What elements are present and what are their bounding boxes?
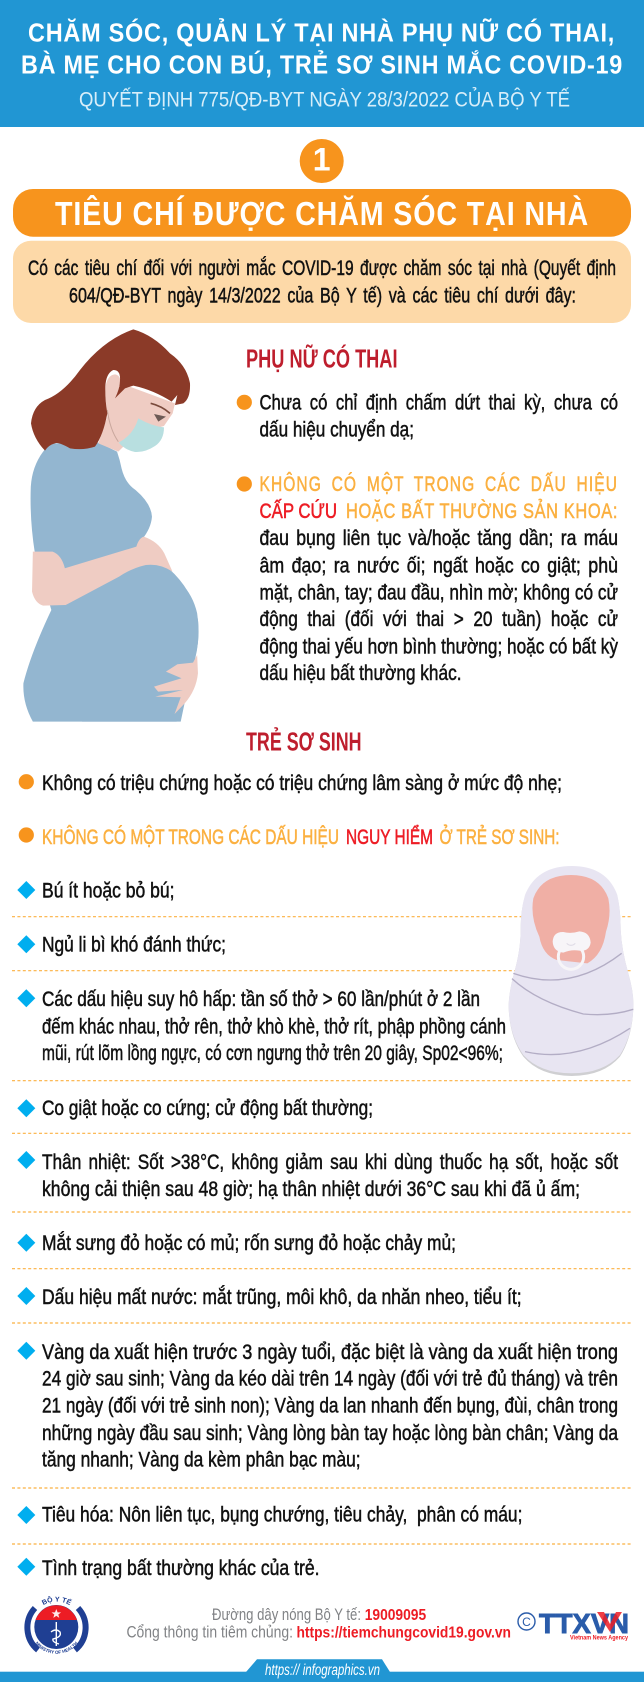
logo: Ministry of Health: BỘ Y TẾ — [42, 1596, 72, 1606]
logo: Ministry of Health: MINISTRY OF HEALTH — [36, 1642, 78, 1654]
danger sign: jaundice — [17, 1340, 618, 1472]
face, neck and ear — [98, 374, 175, 452]
illustration: pregnant woman with mask — [23, 443, 199, 722]
footer contact text: https://tiemchungcovid19.gov.vn — [296, 1624, 511, 1641]
danger sign: seizures: Co giật hoặc co cứng; cử động bất thường; — [42, 1096, 373, 1120]
lower hand — [154, 655, 198, 714]
danger sign: other abnormalities: Tình trạng bất thường khác của trẻ. — [42, 1556, 320, 1580]
danger sign: respiratory distress: Các dấu hiệu suy hô hấp: tần số thở > 60 lần/phút ở 2 lần — [42, 987, 480, 1011]
danger sign: dehydration: Dấu hiệu mất nước: mắt trũng, môi khô, da nhăn nheo, tiểu ít; — [42, 1284, 522, 1309]
hair — [31, 329, 190, 451]
dress — [23, 443, 199, 722]
swaddle — [509, 867, 633, 1076]
pacifier — [553, 931, 591, 969]
criterion: no danger signs: NGUY HIỂM — [346, 824, 433, 849]
eye and brow — [151, 403, 170, 413]
main title — [21, 18, 623, 80]
mask — [119, 418, 164, 452]
danger sign: jaundice: tăng nhanh; Vàng da kèm phân bạc màu; — [42, 1448, 361, 1472]
bottom band with website tab: https:// infographics.vn — [265, 1662, 380, 1679]
danger sign: respiratory distress — [17, 987, 506, 1065]
section number badge — [300, 139, 344, 183]
arm and upper hand — [32, 537, 172, 606]
danger sign: body temperature — [17, 1150, 618, 1201]
heading: pregnant women: PHỤ NỮ CÓ THAI — [246, 343, 398, 373]
footer contact text: Đường dây nóng Bộ Y tế: — [212, 1605, 361, 1624]
danger sign: lethargy: Ngủ li bì khó đánh thức; — [42, 933, 226, 957]
illustration: swaddled newborn with pacifier — [509, 866, 633, 1076]
panel: newborns — [19, 727, 562, 849]
heading: newborns: TRẺ SƠ SINH — [246, 727, 362, 757]
section number badge: 1 — [313, 142, 331, 178]
illustration: woman's head — [31, 329, 190, 452]
criterion: no emergency signs: dấu hiệu bất thường khác. — [260, 661, 462, 685]
criterion: no danger signs: KHÔNG CÓ MỘT TRONG CÁC DẤU HIỆU — [42, 824, 339, 849]
danger sign: respiratory distress: đếm khác nhau, thở rên, thở khò khè, thở rít, phập phồng cánh — [42, 1014, 506, 1038]
logo: TTXVN: C — [522, 1615, 531, 1629]
danger sign: digestion: Tiêu hóa: Nôn liên tục, bụng chướng, tiêu chảy, phân có máu; — [42, 1503, 522, 1527]
belly — [53, 565, 199, 722]
ear — [106, 375, 120, 397]
danger sign: poor feeding: Bú ít hoặc bỏ bú; — [42, 879, 174, 903]
criterion: no termination indication — [237, 390, 618, 442]
criterion: no termination indication: dấu hiệu chuyển dạ; — [260, 418, 414, 442]
criterion: no danger signs: Ở TRẺ SƠ SINH: — [440, 824, 560, 849]
logo: Ministry of Health — [24, 1596, 89, 1654]
criterion: no emergency signs — [237, 471, 618, 685]
logo: TTXVN: TTXVN — [539, 1608, 629, 1639]
footer contact text — [126, 1605, 511, 1641]
footer contact text: 19009095 — [365, 1607, 427, 1624]
intro box — [13, 241, 631, 323]
criterion: no emergency signs: CẤP CỨU — [260, 498, 337, 523]
footer contact text: Cổng thông tin tiêm chủng: — [126, 1622, 293, 1641]
bottom band with website tab — [0, 1659, 644, 1682]
subtitle: QUYẾT ĐỊNH 775/QĐ-BYT NGÀY 28/3/2022 CỦA BỘ Y TẾ — [79, 88, 570, 112]
panel: pregnant women — [237, 343, 618, 685]
logo: TTXVN: Vietnam News Agency — [570, 1636, 629, 1642]
header band — [0, 0, 644, 127]
swaddle folds — [513, 953, 624, 987]
danger sign: eyes and navel: Mắt sưng đỏ hoặc có mủ; rốn sưng đỏ hoặc chảy mủ; — [42, 1230, 456, 1255]
baby face — [532, 875, 610, 963]
